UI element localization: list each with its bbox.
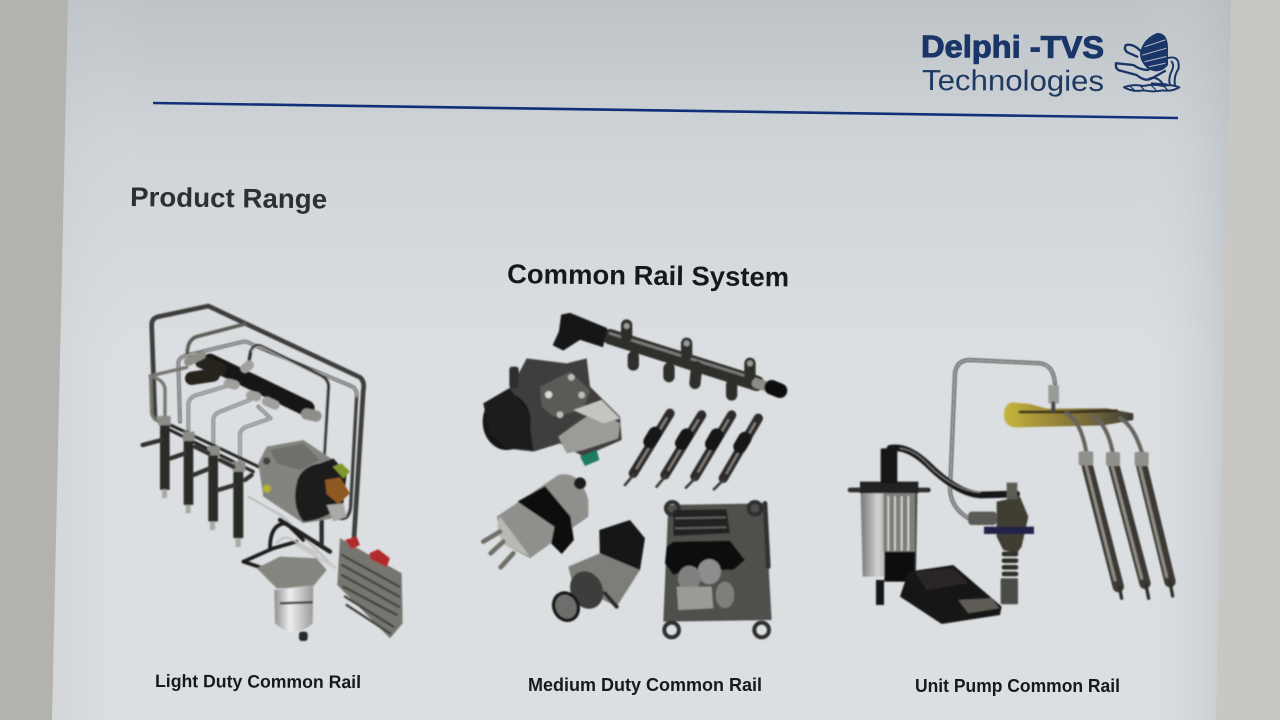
injectors [1067,413,1173,598]
high pressure pump [483,358,622,466]
tube to rail [950,360,1055,520]
logo: Delphi-TVS Technologies [921,29,1179,98]
label: Light Duty Common Rail: Light Duty Common Rail [155,671,361,692]
unit pump [968,483,1034,604]
header rule [153,103,1178,118]
illustration: medium duty components [483,313,780,637]
panel: light duty common rail [143,306,403,692]
injectors [625,413,758,489]
rail [188,355,316,416]
panel: medium duty common rail [483,313,780,695]
logo text: Delphi-TVS: Delphi -TVS [921,29,1104,65]
high pressure tubes [150,306,364,567]
heading: Common Rail System: Common Rail System [507,259,789,292]
ECU [663,502,772,637]
pump [258,440,350,523]
label: Medium Duty Common Rail: Medium Duty Common Rail [528,675,762,695]
injectors [158,416,245,547]
heading: Product Range: Product Range [130,182,327,214]
illustration: light duty system [143,306,403,641]
fuel filter [483,474,588,567]
icon: lion emblem [1116,34,1179,91]
panel: unit pump common rail [850,360,1173,696]
logo text: Technologies: Technologies [922,65,1104,98]
illustration: unit pump system [850,360,1173,624]
common rail [553,313,780,395]
label: Unit Pump Common Rail: Unit Pump Common Rail [915,676,1120,696]
EGR valve [549,520,645,624]
rail [1004,385,1133,427]
fuel filter [243,523,335,641]
ECU [337,537,403,638]
ECU base [900,565,1002,624]
filter [850,448,1017,605]
